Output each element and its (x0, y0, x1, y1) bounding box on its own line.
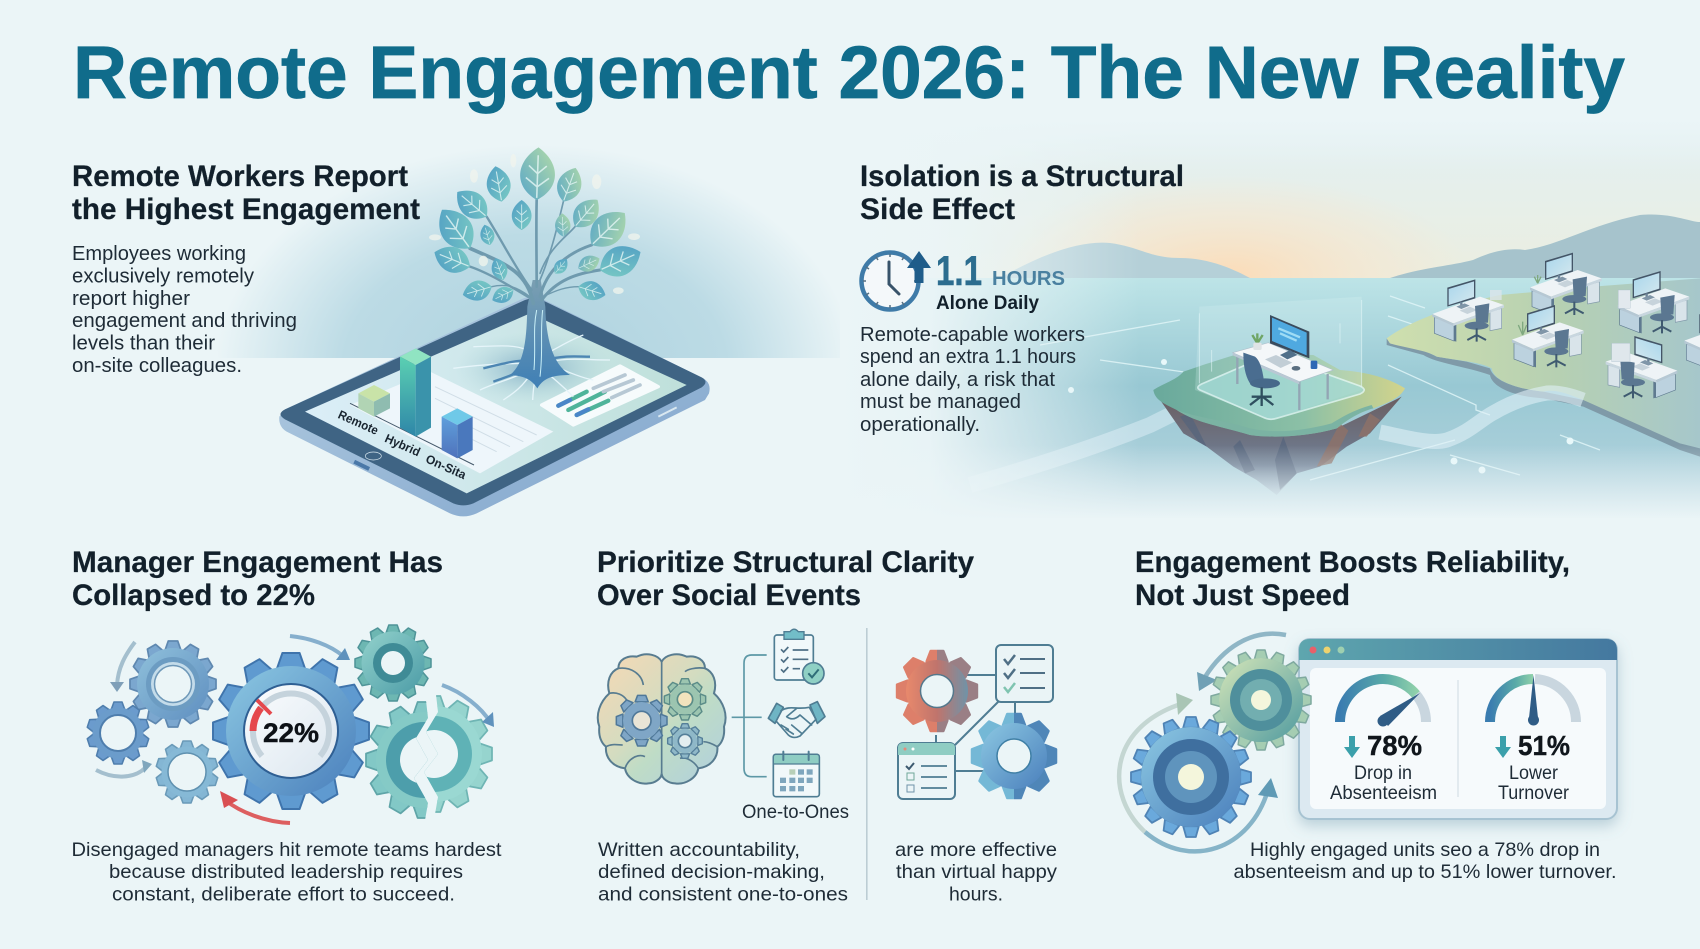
text block: remote workers (72, 242, 297, 377)
gauge: absenteeism (1330, 679, 1437, 804)
text block: isolation (860, 323, 1085, 436)
small gear left (87, 702, 149, 764)
heading: isolation: Side Effect (860, 193, 1015, 226)
icon: task window (898, 743, 955, 799)
icon group: brain and tools (598, 629, 825, 797)
panel: structural clarity (597, 546, 1057, 906)
stat: 1.1 hours alone daily: 1.1 (936, 247, 982, 294)
text block: isolation: alone daily, a risk that (860, 368, 1055, 391)
chart document panel (350, 372, 553, 473)
gauge: turnover (1490, 675, 1576, 804)
icon group: systems (897, 645, 1056, 799)
heading: isolation: Isolation is a Structural (860, 160, 1184, 193)
text block: clarity right (895, 839, 1057, 906)
dashboard window (1299, 639, 1617, 819)
text block: remote workers: on-site colleagues. (72, 354, 242, 377)
bar chart: Hybrid (383, 431, 422, 459)
text block: isolation: spend an extra 1.1 hours (860, 345, 1076, 368)
illustration: tablet with growing tree (279, 147, 710, 516)
label: one-to-ones: One-to-Ones (742, 802, 849, 823)
gauge: absenteeism: Drop in (1354, 762, 1412, 784)
stat: 1.1 hours alone daily (936, 247, 1065, 314)
text block: remote workers: exclusively remotely (72, 264, 255, 288)
heading: reliability: Engagement Boosts Reliability, (1135, 546, 1570, 579)
icon: brain with gears (598, 654, 726, 784)
gauge: turnover: Lower (1509, 762, 1558, 784)
main gear with gauge (213, 653, 369, 809)
tree backdrop panel (238, 161, 832, 358)
text block: reliability: absenteeism and up to 51% lower turnover. (1234, 861, 1616, 883)
gauge: turnover: 51% (1518, 730, 1570, 761)
text block: reliability (1234, 839, 1616, 883)
heading: reliability: Not Just Speed (1135, 579, 1350, 612)
illustration: isolated island desk scene (840, 120, 1700, 520)
text block: isolation: must be managed (860, 390, 1021, 413)
text block: clarity left (598, 839, 848, 906)
heading: manager engagement (72, 546, 443, 612)
text block: remote workers: Employees working (72, 242, 246, 265)
arrows around gears (1119, 634, 1286, 851)
icon: calendar (773, 752, 819, 797)
text block: reliability: Highly engaged units seo a 78% drop in (1250, 839, 1600, 861)
connector (732, 655, 767, 777)
stat: 1.1 hours alone daily: Alone Daily (936, 293, 1039, 314)
gauge: absenteeism: Absenteeism (1330, 782, 1437, 804)
text block: remote workers: engagement and thriving (72, 309, 297, 332)
text block: manager: because distributed leadership requires (109, 861, 463, 883)
icon: clock with up arrow (862, 251, 931, 310)
tablet body (279, 297, 710, 516)
text block: clarity right: are more effective (895, 839, 1057, 861)
panel: reliability (1119, 546, 1617, 883)
heading: manager engagement: Collapsed to 22% (72, 579, 315, 612)
title: Remote Engagement 2026: The New Reality (73, 31, 1625, 114)
panel: remote workers (72, 160, 420, 377)
text block: clarity left: and consistent one-to-ones (598, 884, 848, 906)
tree (429, 147, 646, 400)
heading: remote workers: Remote Workers Report (72, 160, 408, 193)
text block: manager (72, 839, 502, 906)
stat: 1.1 hours alone daily: HOURS (992, 268, 1065, 290)
text block: isolation: operationally. (860, 413, 980, 436)
heading: structural clarity (597, 546, 974, 612)
heading: structural clarity: Prioritize Structural Clarity (597, 546, 974, 579)
icon: green gear (1211, 650, 1311, 750)
gears illustration: 22% (87, 625, 494, 823)
text block: remote workers: levels than their (72, 332, 215, 354)
text block: isolation: Remote-capable workers (860, 323, 1085, 346)
metrics card (542, 366, 658, 425)
panel: isolation (860, 160, 1184, 436)
heading: manager engagement: Manager Engagement Has (72, 546, 443, 579)
text block: remote workers: report higher (72, 287, 190, 310)
floating island with single desk (1153, 297, 1405, 495)
icon: blue gear (972, 714, 1056, 798)
heading: isolation (860, 160, 1184, 226)
bar chart: Remote (336, 408, 381, 438)
gauge: turnover: Turnover (1498, 782, 1569, 804)
small gear upper left (130, 641, 216, 727)
heading: remote workers (72, 160, 420, 226)
gauge: absenteeism: 78% (1367, 730, 1422, 761)
heading: structural clarity: Over Social Events (597, 579, 861, 612)
text block: manager: Disengaged managers hit remote teams hardest (72, 839, 502, 861)
icon: blue gear (1131, 717, 1251, 837)
gear top right (355, 625, 431, 701)
text block: clarity left: defined decision-making, (598, 861, 825, 883)
main gear with gauge: 22% (263, 718, 319, 748)
text block: clarity right: than virtual happy (896, 861, 1057, 883)
broken gear (366, 696, 492, 818)
heading: reliability (1135, 546, 1570, 612)
vertical divider (866, 628, 868, 900)
icon: handshake (768, 702, 825, 737)
icon: checklist (996, 645, 1053, 702)
small gear lower (156, 741, 218, 803)
icon: clipboard (774, 629, 824, 684)
bar chart: On-Sita (424, 452, 468, 482)
bar chart (336, 348, 473, 482)
arrows around gears (96, 636, 494, 823)
text block: manager: constant, deliberate effort to succeed. (112, 884, 455, 906)
text block: clarity left: Written accountability, (598, 839, 800, 861)
island: office group (1387, 253, 1700, 457)
text block: clarity right: hours. (949, 884, 1003, 906)
icon: orange gear (897, 651, 977, 731)
panel: manager engagement (72, 546, 502, 906)
heading: remote workers: the Highest Engagement (72, 193, 420, 226)
